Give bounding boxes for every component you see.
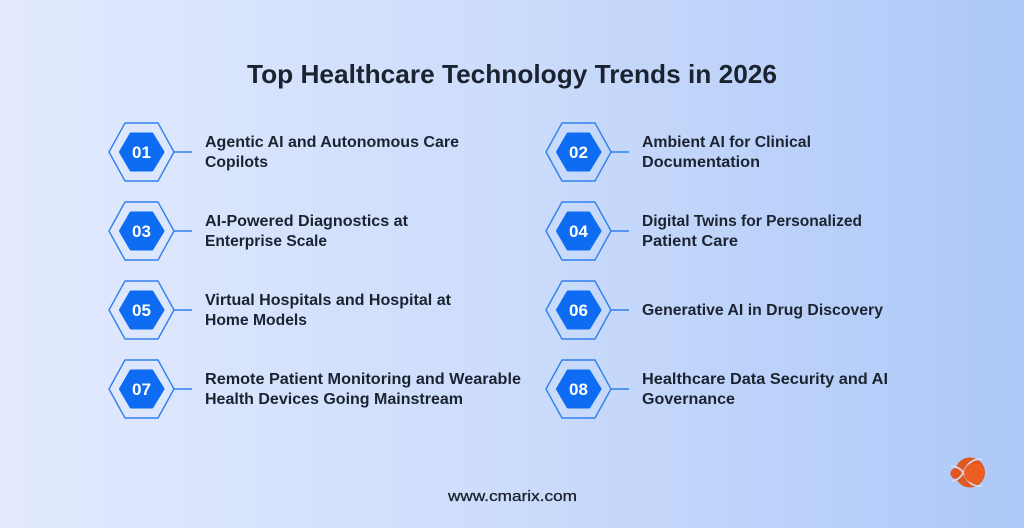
trend 08: 08 (569, 380, 588, 399)
website url: www.cmarix.com (447, 488, 577, 505)
trend 08 (546, 360, 888, 418)
trend 03 (109, 202, 409, 260)
trend 01: Copilots (205, 154, 268, 171)
trend 03: 03 (132, 222, 151, 241)
trend 04: 04 (569, 222, 588, 241)
trend 03: AI-Powered Diagnostics at (205, 213, 409, 230)
trend 07 (109, 360, 521, 418)
trend 02: Ambient AI for Clinical (642, 134, 811, 151)
trend 01 (109, 123, 459, 181)
trend 08: Healthcare Data Security and AI (642, 371, 888, 388)
trend 04 (546, 202, 862, 260)
trend 02: Documentation (642, 154, 760, 171)
trend 05: Home Models (205, 312, 307, 329)
trend 05: Virtual Hospitals and Hospital at (205, 292, 452, 309)
trend 02 (546, 123, 811, 181)
trend 05 (109, 281, 452, 339)
trend 01: Agentic AI and Autonomous Care (205, 134, 459, 151)
trend 04: Patient Care (642, 233, 738, 250)
trend 08: Governance (642, 391, 735, 408)
trend 03: Enterprise Scale (205, 233, 327, 250)
trend 06 (546, 281, 883, 339)
title: Top Healthcare Technology Trends in 2026 (247, 59, 777, 89)
trend 07: 07 (132, 380, 151, 399)
trend 05: 05 (132, 301, 151, 320)
trend 06: 06 (569, 301, 588, 320)
trend 01: 01 (132, 143, 151, 162)
trend 02: 02 (569, 143, 588, 162)
icon: cmarix logo (950, 458, 985, 488)
trend 06: Generative AI in Drug Discovery (642, 302, 883, 319)
trend 04: Digital Twins for Personalized (642, 213, 862, 230)
trend 07: Health Devices Going Mainstream (205, 391, 463, 408)
trend 07: Remote Patient Monitoring and Wearable (205, 371, 521, 388)
